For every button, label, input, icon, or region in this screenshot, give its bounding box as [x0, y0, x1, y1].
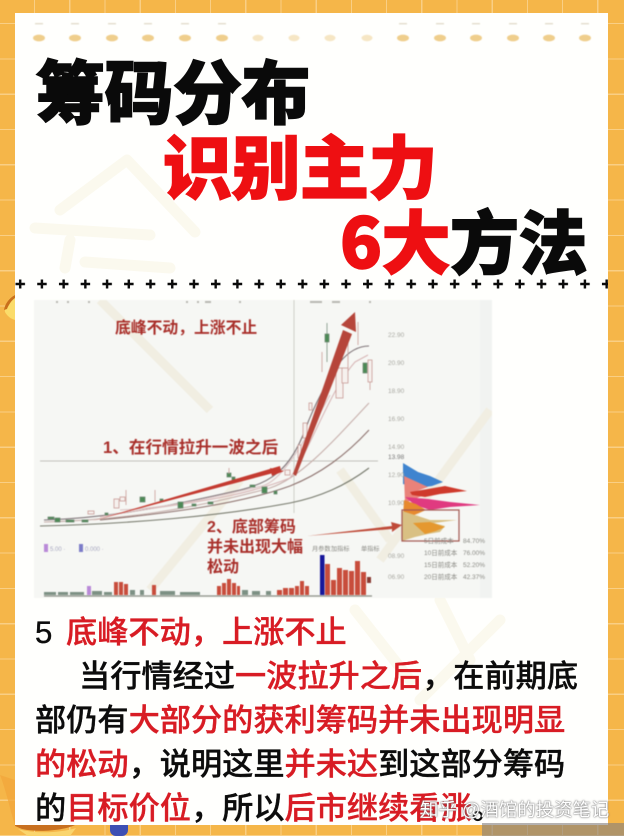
volume legend: 0.000 · [85, 547, 104, 553]
chart: stock chip distribution screenshot [34, 300, 492, 598]
arrow: pointing to base chips [307, 522, 402, 536]
chart annotation: step 2: 松动 [207, 558, 239, 576]
volume legend [44, 544, 104, 553]
chip peaks [402, 463, 480, 541]
price axis labels: 18.90 [388, 388, 405, 395]
price axis labels: 12.90 [388, 472, 405, 479]
chart annotation: step 2: 2、底部筹码 [207, 517, 296, 536]
chart annotation: step 2: 并未出现大幅 [207, 537, 303, 556]
body line 4: 的目标价位，所以后市继续看涨。 [35, 791, 503, 826]
volume tabs: 单指标 [361, 545, 380, 553]
title [36, 38, 587, 288]
legend: cost lines: 76.00% [463, 550, 485, 557]
legend: cost lines: 15日前成本 [424, 560, 458, 569]
icon: blue decoration bottom [110, 825, 128, 836]
title line 1: 筹码分布 [36, 38, 310, 138]
volume tabs [312, 545, 380, 553]
chart annotation: step 2 [207, 517, 303, 576]
price axis labels: 20.90 [388, 360, 405, 367]
legend: cost lines: 10日前成本 [424, 548, 458, 557]
watermark band [482, 823, 624, 836]
divider: row of plus signs [16, 280, 608, 288]
chart annotation: title: 底峰不动，上涨不止 [115, 318, 257, 337]
moving averages [40, 346, 369, 526]
body line 1: 当行情经过一波拉升之后，在前期底 [79, 659, 578, 694]
legend: cost lines: 42.37% [463, 574, 485, 581]
title line 3: 6大方法 [340, 188, 587, 288]
watermark text: 知乎 @酒馆的投资笔记 [420, 799, 609, 820]
volume legend: 5.00 · [50, 547, 65, 553]
candlesticks [48, 323, 367, 522]
price axis labels: 14.90 [388, 444, 405, 451]
decorative top dots [32, 22, 592, 42]
price axis labels: 08.90 [388, 553, 405, 560]
price axis labels: 06.90 [388, 574, 405, 581]
body line 2: 部仍有大部分的获利筹码并未出现明显 [35, 703, 565, 738]
price axis labels: 13.98 [388, 454, 405, 461]
legend: cost lines: 52.20% [463, 562, 485, 569]
text block: method 5 [35, 615, 578, 826]
reference lines [40, 300, 378, 513]
body line 3: 的松动，说明这里并未达到这部分筹码 [35, 747, 565, 782]
volume bars [44, 555, 371, 595]
volume tabs: 加指标 [331, 545, 350, 553]
arrow: rising trend [92, 312, 356, 521]
legend: cost lines: 20日前成本 [424, 572, 458, 581]
icon: gold coin left edge [4, 295, 15, 320]
highlight box [402, 510, 459, 541]
legend: cost lines [424, 536, 485, 581]
top tick marks [56, 301, 371, 303]
volume tabs: 月参数 [312, 545, 331, 553]
price axis labels: 22.90 [388, 332, 405, 339]
price axis labels: 16.90 [388, 416, 405, 423]
legend: cost lines: 84.70% [463, 538, 485, 545]
chart annotation: step 1: 1、在行情拉升一波之后 [103, 437, 279, 457]
heading: 5 底峰不动，上涨不止 [35, 615, 347, 650]
price axis labels [388, 332, 405, 581]
price axis labels: 10.90 [388, 500, 405, 507]
legend: cost lines: 5日前成本 [424, 536, 454, 545]
title line 2: 识别主力 [163, 113, 437, 213]
icon: gold coin bottom left [0, 776, 76, 836]
